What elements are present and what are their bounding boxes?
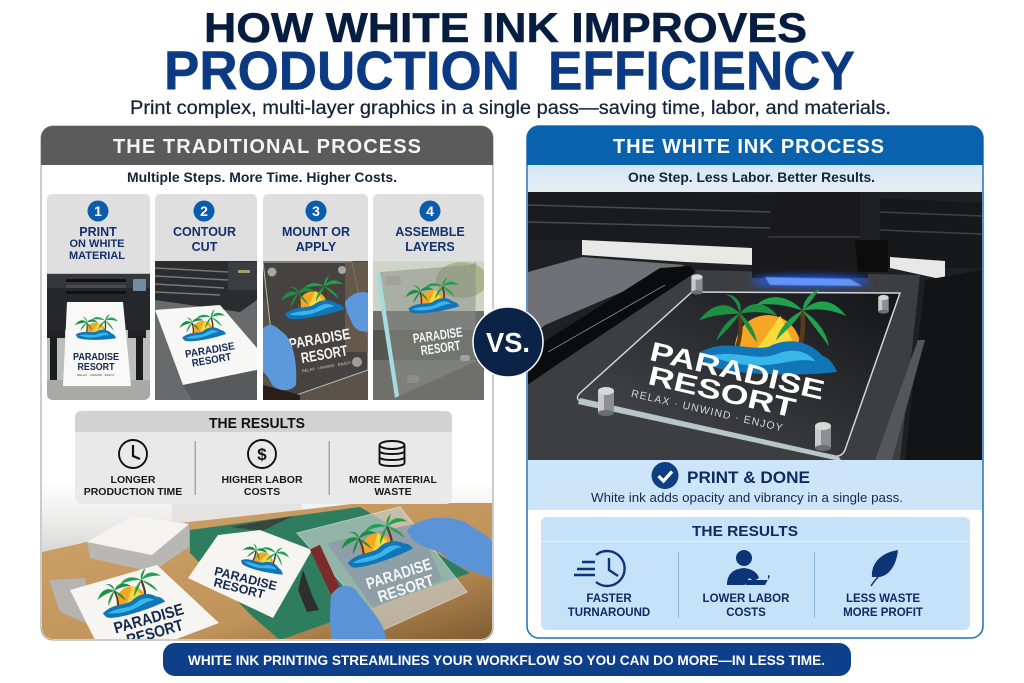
result: longer production time: LONGER [111,474,156,486]
title line 2: EFFICIENCY [548,40,855,102]
step 2 label: CUT [192,240,218,254]
step 4 card [373,194,488,400]
printed sheet center: PARADISE [213,564,278,593]
result: faster turnaround: FASTER [586,593,632,605]
panel header: THE WHITE INK PROCESS [613,136,884,158]
printer bed [528,270,920,460]
panel header [41,126,493,165]
title line 2 [164,40,855,102]
acrylic sign 3: RELAX · UNWIND · ENJOY [301,360,352,373]
acrylic sign 3: RESORT [300,342,349,367]
step 4 label: ASSEMBLE [395,225,465,239]
acrylic sign 4: PARADISE [412,324,464,346]
result: lower labor costs: COSTS [726,607,766,619]
print and done text: White ink adds opacity and vibrancy in a single pass. [591,490,903,505]
icon: clock [119,440,147,468]
printed sign text [632,342,824,431]
printed sheet center [188,530,312,618]
result: faster turnaround [568,593,650,619]
result: lower labor costs: LOWER LABOR [703,593,790,605]
printed sign text: RELAX · UNWIND · ENJOY [630,388,784,434]
step 4 label: LAYERS [405,240,455,254]
printed sign text: PARADISE [647,336,827,406]
result: faster turnaround: TURNAROUND [568,607,650,619]
icon: check badge [652,462,678,489]
acrylic sign 4: RESORT [420,338,462,358]
result: higher labor costs [221,474,303,498]
result: lower labor costs [703,593,790,619]
printed sign 2: PARADISE [184,340,236,361]
acrylic sign in hands [297,507,467,630]
printed sign 2 [177,307,237,371]
printed sign 1: RELAX · UNWIND · ENJOY [77,373,115,377]
green cutting mat [190,507,470,640]
panel background [41,126,493,640]
results box [75,411,452,504]
tagline strip: One Step. Less Labor. Better Results. [628,169,875,185]
icon: dollar: $ [257,445,267,464]
icon: fast clock [574,551,625,586]
title line 2: PRODUCTION [164,40,520,102]
acrylic sign 3 [278,274,357,375]
print carriage [752,236,888,278]
acrylic plate [577,292,900,460]
VS badge: VS. [486,327,530,358]
printed sheet left: RESORT [125,617,185,649]
step 1 label: MATERIAL [69,250,125,262]
print and done heading: PRINT & DONE [687,468,810,487]
bottom banner [163,643,851,676]
step 1 label: PRINT [79,225,117,239]
icon: step number 1 [88,200,108,222]
wooden desk [42,503,492,640]
tagline strip [528,165,982,193]
icon: step number 1: 1 [94,203,102,219]
icon: step number 2 [194,200,214,222]
UV light glow [750,276,870,286]
printed sign 1: RESORT [78,361,115,373]
printer rail [528,198,982,268]
result: less waste more profit: MORE PROFIT [843,607,923,619]
tweezers [230,516,293,531]
acrylic sign in hands: RESORT [376,572,436,606]
UV printer photo [528,190,982,460]
print and done strip [528,460,982,510]
utility knife [298,570,319,612]
panel: white ink process [527,126,983,638]
acrylic sign in hands: PARADISE [364,556,434,593]
title [164,4,855,102]
icon: step number 3: 3 [312,203,320,219]
result: longer production time [84,474,182,498]
gloved hands [263,292,368,390]
printed sheet left [49,565,219,639]
workshop photo [42,496,492,639]
icon: leaf [871,550,898,586]
printed sign 2: RESORT [191,351,233,370]
title line 1: HOW WHITE INK IMPROVES [204,4,807,51]
icon: step number 2: 2 [200,203,208,219]
result: higher labor costs: COSTS [244,486,280,498]
step 2 label: CONTOUR [173,225,236,239]
panel tagline: Multiple Steps. More Time. Higher Costs. [127,169,397,185]
result: longer production time: PRODUCTION TIME [84,486,182,498]
VS badge [473,307,543,377]
printed sheet left: PARADISE [112,601,186,637]
icon: step number 4: 4 [426,203,434,219]
panel header [527,126,983,165]
result: more material waste [349,474,438,498]
step 2 label [173,225,236,254]
acrylic sign 4 [404,276,468,359]
gloved hands [330,518,492,640]
step 1 label [69,225,125,262]
step 4 label [395,225,465,254]
result: more material waste: MORE MATERIAL [349,474,438,486]
result: less waste more profit [843,593,923,619]
standoffs [691,274,703,294]
panel header: THE TRADITIONAL PROCESS [113,136,421,158]
step 3 label [282,225,350,254]
printed sign 1 [73,314,119,377]
step 3 label: MOUNT OR [282,225,350,239]
printed sheet center: RESORT [212,575,266,602]
icon: acrylic standoffs [385,276,470,383]
wall [582,240,945,280]
step 1 label: ON WHITE [70,238,124,250]
paper stack [87,515,189,572]
subtitle: Print complex, multi-layer graphics in a single pass—saving time, labor, and materials. [130,98,891,119]
icon: step number 3 [306,200,326,222]
icon: dollar [248,440,276,468]
step 3 label: APPLY [296,240,337,254]
icon: material stack [380,441,404,466]
black left rail [528,266,696,384]
result: more material waste: WASTE [374,486,412,498]
panel background [527,126,983,638]
icon: acrylic standoffs [268,266,362,367]
results box [541,517,970,630]
printed sign 1: PARADISE [73,351,119,363]
printed sign text: RESORT [646,361,799,424]
step 2 card [155,194,257,400]
icon: step number 4 [420,200,440,222]
panel: traditional process [41,126,493,654]
result: higher labor costs: HIGHER LABOR [221,474,303,486]
step 3 card [263,194,368,400]
result: less waste more profit: LESS WASTE [846,593,920,605]
acrylic sign 3: PARADISE [288,326,352,353]
results heading: THE RESULTS [209,416,305,432]
results heading: THE RESULTS [692,523,798,540]
icon: person with reduced labor [727,550,770,585]
grey left bed [528,257,685,328]
step 1 card [47,194,150,400]
printed logo [698,290,846,374]
bottom banner: WHITE INK PRINTING STREAMLINES YOUR WORKFLOW SO YOU CAN DO MORE—IN LESS TIME. [188,653,825,668]
